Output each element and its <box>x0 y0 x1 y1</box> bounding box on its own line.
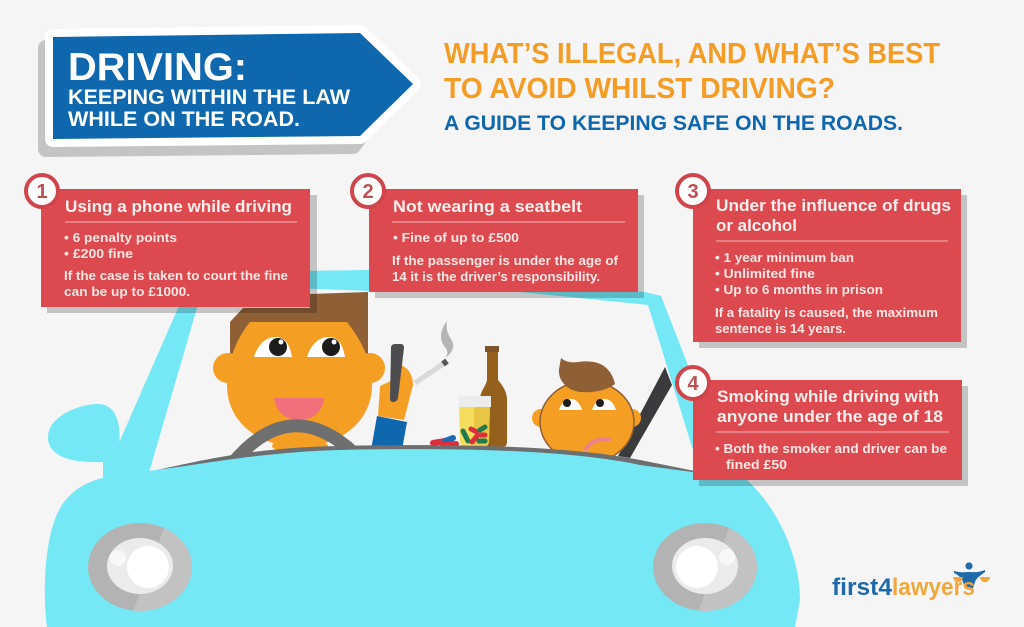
road sign banner: DRIVING: <box>68 46 247 89</box>
panel 3 text: • Unlimited fine <box>715 266 815 281</box>
panel 3 text: sentence is 14 years. <box>715 321 846 336</box>
panel 4 text: fined £50 <box>726 457 787 472</box>
badge 1: 1 <box>36 181 48 203</box>
driver eyes <box>254 337 345 357</box>
panel 1 text: Using a phone while driving <box>65 197 292 216</box>
road sign banner <box>46 33 413 149</box>
driver chin <box>272 439 328 453</box>
panel 4 text: Smoking while driving with <box>717 387 939 406</box>
badge 4 <box>677 367 709 399</box>
cigarette and smoke <box>415 321 453 383</box>
jar of pills <box>459 396 491 447</box>
panel 1: phone <box>26 175 317 313</box>
panel 2 text: Not wearing a seatbelt <box>393 197 582 216</box>
passenger mouth <box>586 439 609 449</box>
main heading <box>444 38 940 135</box>
panel 2: seatbelt <box>352 175 644 298</box>
badge 3: 3 <box>687 181 699 203</box>
panel 4 text: anyone under the age of 18 <box>717 407 943 426</box>
logo: first4lawyers: lawyers <box>892 574 975 601</box>
panel 1 text <box>64 197 297 299</box>
panel 2 text: 14 it is the driver’s responsibility. <box>392 269 600 284</box>
badge 4: 4 <box>687 373 699 395</box>
panel 2 text: If the passenger is under the age of <box>392 253 619 268</box>
badge 1 <box>26 175 58 207</box>
road sign banner: WHILE ON THE ROAD. <box>68 107 300 131</box>
passenger <box>532 358 641 463</box>
panel 4 text <box>715 387 949 472</box>
badge 2 <box>352 175 384 207</box>
panel 1 text: If the case is taken to court the fine <box>64 268 288 283</box>
logo: scales figure <box>953 562 990 588</box>
dashboard <box>157 445 700 482</box>
panel 3 text: or alcohol <box>716 216 797 235</box>
panel 1 text: • 6 penalty points <box>64 230 177 245</box>
driver hair <box>230 292 368 360</box>
road sign banner: KEEPING WITHIN THE LAW <box>68 85 351 109</box>
main heading: WHAT’S ILLEGAL, AND WHAT’S BEST <box>444 38 940 70</box>
panel 3 text: • Up to 6 months in prison <box>715 282 883 297</box>
steering wheel <box>232 426 355 464</box>
passenger hair <box>559 358 615 392</box>
arm holding phone <box>371 344 413 450</box>
wing mirror <box>48 404 120 462</box>
panel 3 text: Under the influence of drugs <box>716 196 951 215</box>
panel 2 text: • Fine of up to £500 <box>393 230 519 245</box>
panel 3 text: If a fatality is caused, the maximum <box>715 305 938 320</box>
panel 4: smoking <box>677 367 968 486</box>
panel 1 text: can be up to £1000. <box>64 284 190 299</box>
car roof and pillars <box>112 270 725 485</box>
phone <box>390 344 404 402</box>
panel 3 text <box>715 196 951 336</box>
left headlight <box>88 523 192 611</box>
car body <box>45 404 800 627</box>
panel 4 text: • Both the smoker and driver can be <box>715 441 947 456</box>
main heading: A GUIDE TO KEEPING SAFE ON THE ROADS. <box>444 112 903 135</box>
bottle <box>480 346 507 447</box>
right headlight <box>653 523 757 611</box>
logo: first4lawyers: first4 <box>832 574 893 601</box>
driver face <box>227 322 372 447</box>
passenger eyes <box>559 399 616 410</box>
loose pills <box>433 438 456 445</box>
seatbelt <box>618 367 672 458</box>
badge 3 <box>677 175 709 207</box>
passenger ears <box>532 409 641 427</box>
panel 3: drugs or alcohol <box>677 175 967 348</box>
driver tongue <box>274 398 324 420</box>
passenger head <box>540 381 634 463</box>
logo: first4lawyers <box>832 562 990 601</box>
driver ears <box>213 353 385 383</box>
panel 1 text: • £200 fine <box>64 246 133 261</box>
main heading: TO AVOID WHILST DRIVING? <box>444 73 835 105</box>
panel 2 text <box>392 197 625 284</box>
badge 2: 2 <box>362 181 374 203</box>
panel 3 text: • 1 year minimum ban <box>715 250 854 265</box>
driver <box>213 292 385 464</box>
